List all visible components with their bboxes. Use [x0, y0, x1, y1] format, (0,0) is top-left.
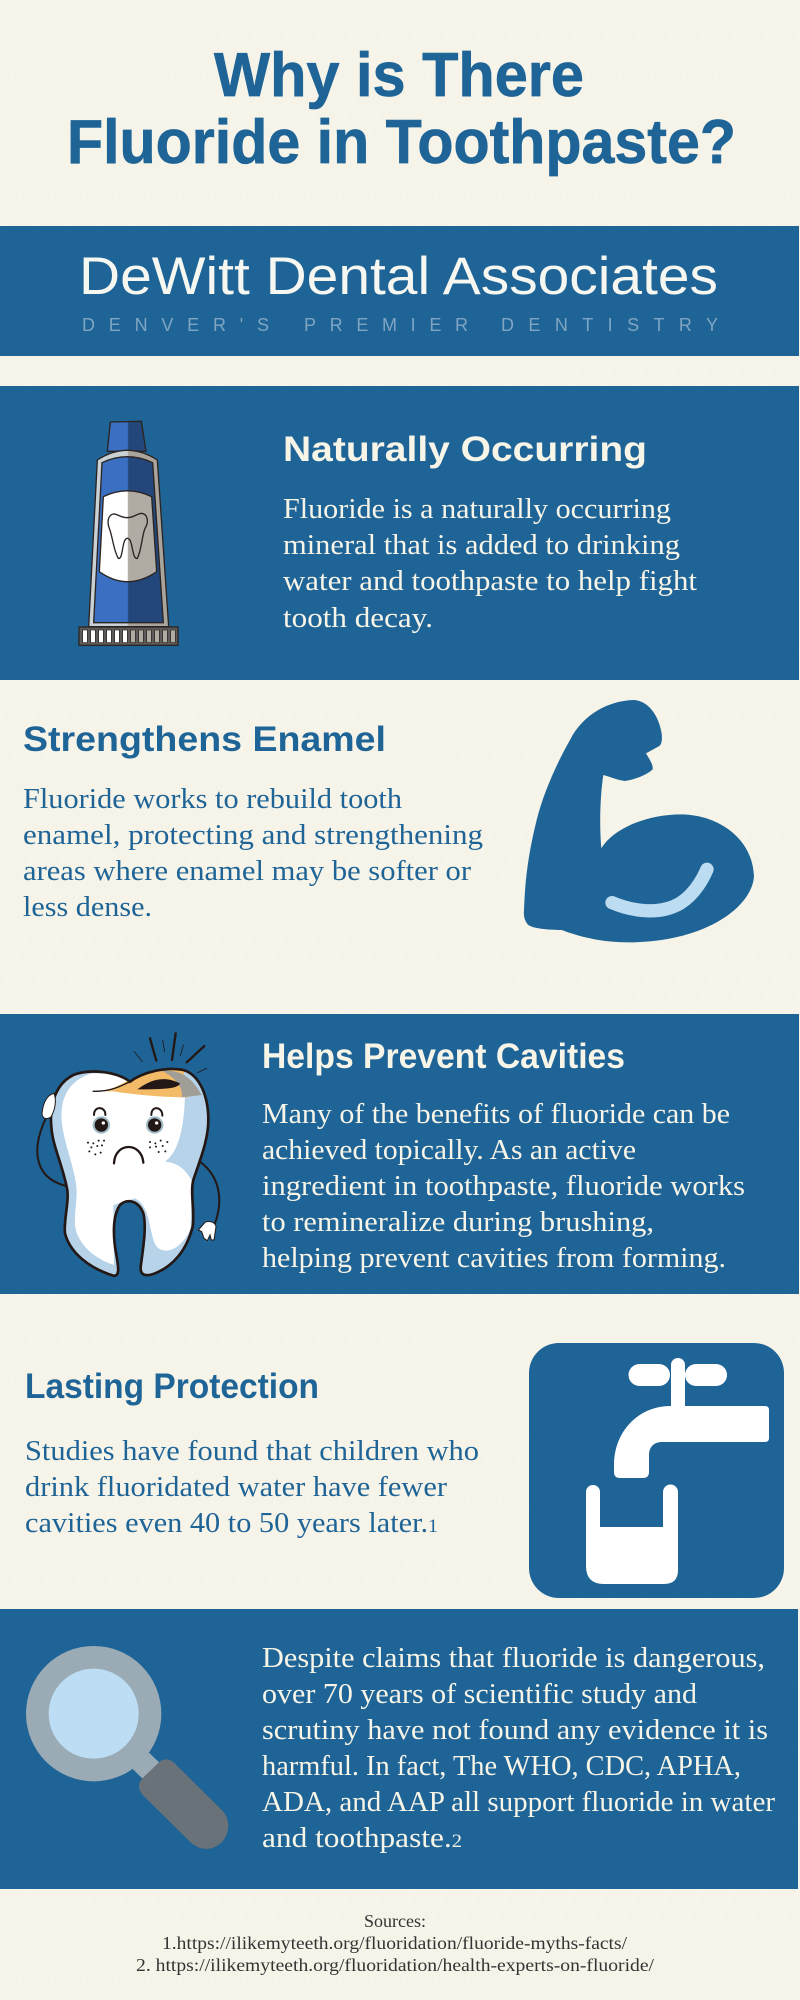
body text	[23, 783, 483, 923]
body text: ADA, and AAP all support fluoride in water	[262, 1786, 775, 1818]
body text	[262, 1642, 775, 1854]
sources: 2. https://ilikemyteeth.org/fluoridation/health-experts-on-fluoride/	[136, 1955, 654, 1975]
logo name: DeWitt Dental Associates	[79, 247, 718, 306]
heading: Helps Prevent Cavities	[262, 1037, 625, 1076]
body text: harmful. In fact, The WHO, CDC, APHA,	[262, 1750, 741, 1782]
title	[67, 41, 736, 177]
logo tagline: DENVER'S	[82, 315, 269, 335]
logo tagline: DENTISTRY	[501, 315, 718, 335]
body text: achieved topically. As an active	[262, 1134, 636, 1166]
body text: Despite claims that fluoride is dangerous,	[262, 1642, 765, 1674]
body text: Fluoride is a naturally occurring	[283, 493, 671, 525]
panel: lasting protection	[25, 1343, 784, 1598]
logo tagline	[82, 315, 718, 335]
sources: 1.https://ilikemyteeth.org/fluoridation/fluoride-myths-facts/	[162, 1933, 627, 1953]
body text: and toothpaste. 2	[262, 1822, 462, 1854]
body text: tooth decay.	[283, 602, 433, 634]
icon: faucet and glass	[529, 1343, 784, 1598]
panel: safety evidence	[0, 1609, 798, 1889]
icon: toothpaste tube	[79, 421, 178, 645]
body text: Fluoride works to rebuild tooth	[23, 783, 403, 815]
body text: areas where enamel may be softer or	[23, 855, 471, 887]
sources: Sources:	[364, 1911, 426, 1931]
icon: flexed arm	[524, 700, 754, 942]
body text	[262, 1098, 745, 1274]
body text	[25, 1435, 479, 1539]
body text: water and toothpaste to help fight	[283, 565, 697, 597]
heading: Strengthens Enamel	[23, 720, 386, 759]
panel: naturally occurring	[0, 386, 799, 680]
body text: scrutiny have not found any evidence it is	[262, 1714, 768, 1746]
body text: helping prevent cavities from forming.	[262, 1242, 726, 1274]
body text: enamel, protecting and strengthening	[23, 819, 483, 851]
body text	[283, 493, 697, 634]
body text: Many of the benefits of fluoride can be	[262, 1098, 730, 1130]
icon: worried tooth with cavity	[37, 1033, 219, 1276]
sources	[136, 1911, 654, 1975]
body text: drink fluoridated water have fewer	[25, 1471, 447, 1503]
icon: magnifying glass	[26, 1646, 228, 1849]
panel: logo banner	[0, 226, 799, 356]
logo tagline: PREMIER	[304, 315, 468, 335]
body text: ingredient in toothpaste, fluoride works	[262, 1170, 745, 1202]
heading: Lasting Protection	[25, 1367, 319, 1406]
body text: mineral that is added to drinking	[283, 529, 680, 561]
title: Fluoride in Toothpaste?	[67, 108, 736, 177]
panel: strengthens enamel	[23, 700, 754, 942]
title: Why is There	[214, 41, 584, 110]
body text: over 70 years of scientific study and	[262, 1678, 698, 1710]
body text: cavities even 40 to 50 years later. 1	[25, 1507, 438, 1539]
panel: helps prevent cavities	[0, 1014, 799, 1294]
body text: Studies have found that children who	[25, 1435, 479, 1467]
body text: less dense.	[23, 891, 152, 923]
heading: Naturally Occurring	[283, 430, 647, 469]
body text: to remineralize during brushing,	[262, 1206, 654, 1238]
